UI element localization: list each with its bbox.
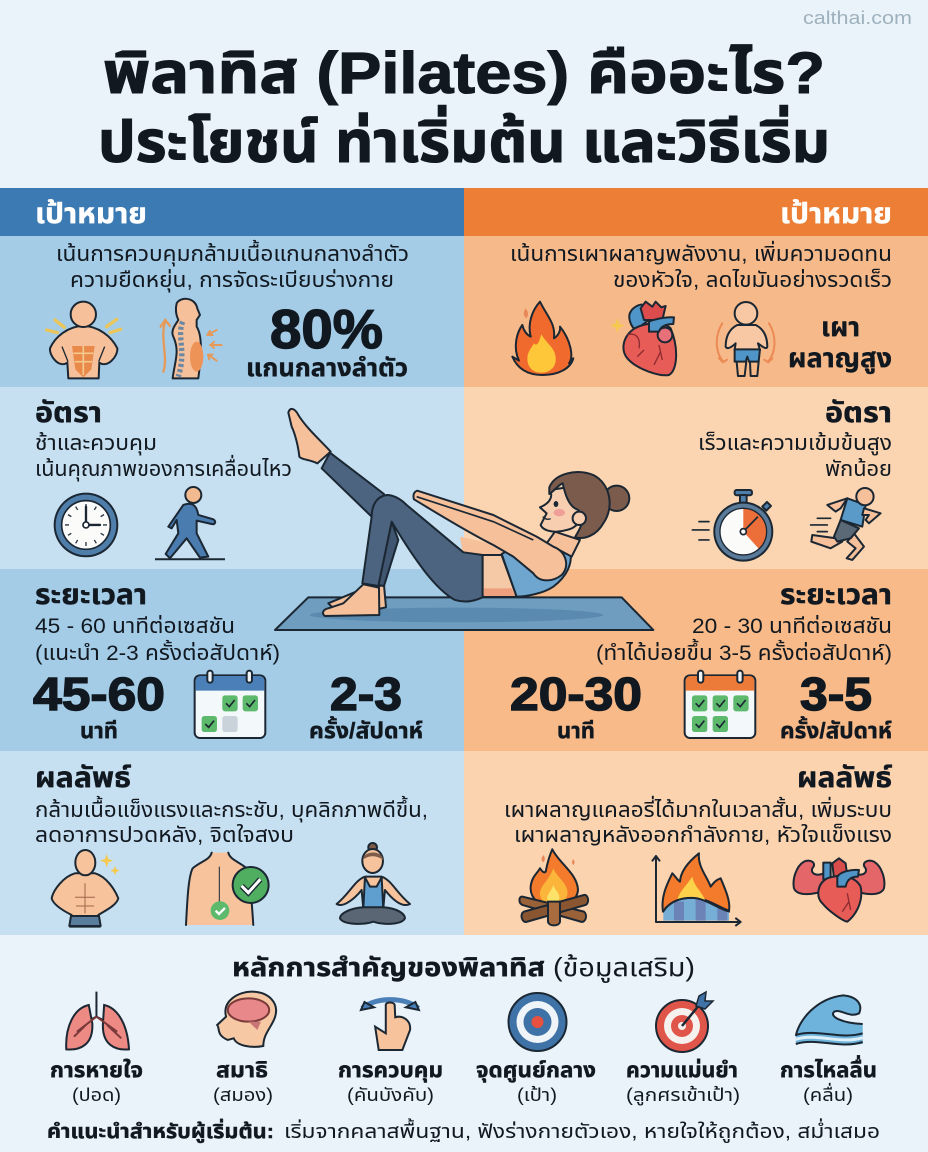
label: การหายใจ [50,1059,143,1082]
stat: 3-5 per week [780,668,892,743]
torso skin below arm [460,537,503,557]
pace description: พักน้อย [825,457,892,481]
duration description [35,614,280,665]
icon: clock [54,493,118,557]
stat: 80 percent: 80% [270,298,383,360]
pace description: เน้นคุณภาพของการเคลื่อนไหว [35,454,292,482]
icon: muscular heart [794,858,884,922]
goal description: เน้นการควบคุมกล้ามเนื้อแกนกลางลำตัว [56,239,409,267]
panel: left column header [0,188,464,236]
stat: 2-3 per week: 2-3 [330,668,402,720]
midriff [483,555,517,597]
icon: hand with joystick arrows [361,1000,419,1050]
icon: afterburn chart [652,853,741,926]
duration description: (ทำได้บ่อยขึ้น 3-5 ครั้งต่อสัปดาห์) [596,638,892,665]
results description [35,795,428,847]
pace heading: อัตรา [825,397,892,428]
panel: hiit goal [464,236,928,387]
stat: 20-30 minutes: นาที [557,718,595,743]
duration heading: ระยะเวลา [780,579,892,610]
icon: blue target [508,993,566,1051]
duration heading: ระยะเวลา [35,579,147,610]
duration description: 45 - 60 นาทีต่อเซสชัน [35,614,235,638]
goal description: ของหัวใจ, ลดไขมันอย่างรวดเร็ว [613,267,892,292]
panel: hiit duration [464,569,928,751]
stat: 3-5 per week: ครั้ง/สัปดาห์ [780,716,892,743]
panel: hiit pace [464,387,928,569]
panel: pilates goal [0,236,464,387]
duration description [596,614,892,665]
label: การควบคุม [338,1059,443,1083]
head [540,472,629,538]
beginner tip [47,1118,880,1144]
icon: core muscles torso [47,302,121,378]
sublabel: (ปอด) [72,1085,121,1105]
principle: precision [626,992,740,1107]
icon: healthy back [186,853,269,925]
bent leg [362,495,483,601]
icon: spine alignment [161,299,222,378]
back foot [328,585,386,609]
icon: arrow in target [656,992,713,1052]
raised leg [322,453,384,517]
title: ประโยชน์ ท่าเริ่มต้น และวิธีเริ่ม [98,104,830,175]
stat: 45-60 minutes [33,668,165,743]
pace heading: อัตรา [35,397,102,428]
icon: wave [796,995,863,1044]
results description: เผาผลาญหลังออกกำลังกาย, หัวใจแข็งแรง [514,822,892,847]
pace description [35,431,292,482]
duration description: 20 - 30 นาทีต่อเซสชัน [692,614,892,638]
principle: flow [780,995,877,1105]
pace description: ช้าและควบคุม [35,431,157,456]
panel: pilates pace [0,387,464,569]
front foot [323,584,379,616]
heading: key pilates principles [232,952,695,983]
stat: 20-30 minutes [510,668,642,743]
raised foot [288,409,331,463]
sublabel: (คลื่น) [803,1082,853,1105]
yoga mat [275,597,653,630]
results description: กล้ามเนื้อแข็งแรงและกระชับ, บุคลิกภาพดีขึ้น, [35,795,428,823]
stat: high burn: เผา [821,312,860,342]
goal description [510,240,892,292]
sublabel: (เป้า) [517,1085,557,1105]
results heading: ผลลัพธ์ [35,762,132,793]
icon: body with fat loss [717,302,775,376]
stat: high burn [788,312,892,374]
stat: 3-5 per week: 3-5 [800,668,872,720]
stat: 80 percent: แกนกลางลำตัว [246,354,408,382]
goal description: ความยืดหยุ่น, การจัดระเบียบร่างกาย [70,268,394,293]
heading: key pilates principles: หลักการสำคัญของพิลาทิส [232,952,545,982]
panel: hiit results [464,751,928,935]
label: การไหลลื่น [780,1055,877,1082]
results description: เผาผลาญแคลอรี่ได้มากในเวลาสั้น, เพิ่มระบบ [504,795,892,822]
back lower leg [378,522,398,586]
stat: high burn: ผลาญสูง [788,343,892,374]
icon: heart [610,302,676,375]
sublabel: (คันบังคับ) [347,1085,434,1105]
principle: centering [476,993,596,1105]
icon: calendar 3 of 4 checked [195,671,265,738]
sublabel: (ลูกศรเข้าเป้า) [626,1085,740,1107]
watermark: calthai.com [803,8,912,28]
duration description: (แนะนำ 2-3 ครั้งต่อสัปดาห์) [35,639,280,665]
sublabel: (สมอง) [213,1085,273,1105]
beginner tip: คำแนะนำสำหรับผู้เริ่มต้น: [47,1118,274,1143]
icon: stopwatch [692,490,773,562]
panel: right column header [464,188,928,236]
arms [413,491,566,580]
goal description: เน้นการเผาผลาญพลังงาน, เพิ่มความอดทน [510,240,892,266]
icon: meditation [337,843,410,924]
principle: breathing [50,992,143,1105]
beginner tip: เริ่มจากคลาสพื้นฐาน, ฟังร่างกายตัวเอง, หายใจให้ถูกต้อง, สม่ำเสมอ [284,1118,880,1144]
panel: pilates results [0,751,464,935]
goal description [56,239,409,293]
icon: walking person [155,487,225,559]
pace description [698,430,892,481]
icon: running person [811,488,881,560]
stat: 80 percent [246,298,408,382]
illustration: woman doing pilates on mat [275,409,653,630]
pace description: เร็วและความเข้มข้นสูง [698,430,892,456]
sports top [502,538,571,597]
panel: left column header: เป้าหมาย [35,198,147,229]
icon: campfire [519,849,588,925]
label: ความแม่นยำ [626,1059,738,1082]
icon: lungs [66,992,129,1050]
principle: control [338,1000,443,1105]
stat: 2-3 per week [309,668,423,743]
principle: concentration [213,992,276,1105]
results description: ลดอาการปวดหลัง, จิตใจสงบ [35,824,294,847]
results description [504,795,892,847]
icon: calendar 5 checked [685,671,755,738]
panel: pilates duration [0,569,464,751]
title: พิลาทิส (Pilates) คืออะไร? [103,41,825,106]
panel: right column header: เป้าหมาย [780,198,892,229]
stat: 2-3 per week: ครั้ง/สัปดาห์ [309,716,423,743]
stat: 45-60 minutes: นาที [80,718,118,743]
title [98,41,830,175]
icon: flame [512,302,573,375]
icon: head with brain [217,992,276,1047]
neck [547,532,580,557]
results heading: ผลลัพธ์ [797,762,893,793]
icon: toned torso [52,850,120,927]
label: จุดศูนย์กลาง [476,1059,596,1083]
stat: 45-60 minutes: 45-60 [33,668,165,720]
label: สมาธิ [216,1059,268,1082]
heading: key pilates principles: (ข้อมูลเสริม) [553,952,695,983]
stat: 20-30 minutes: 20-30 [510,668,642,720]
